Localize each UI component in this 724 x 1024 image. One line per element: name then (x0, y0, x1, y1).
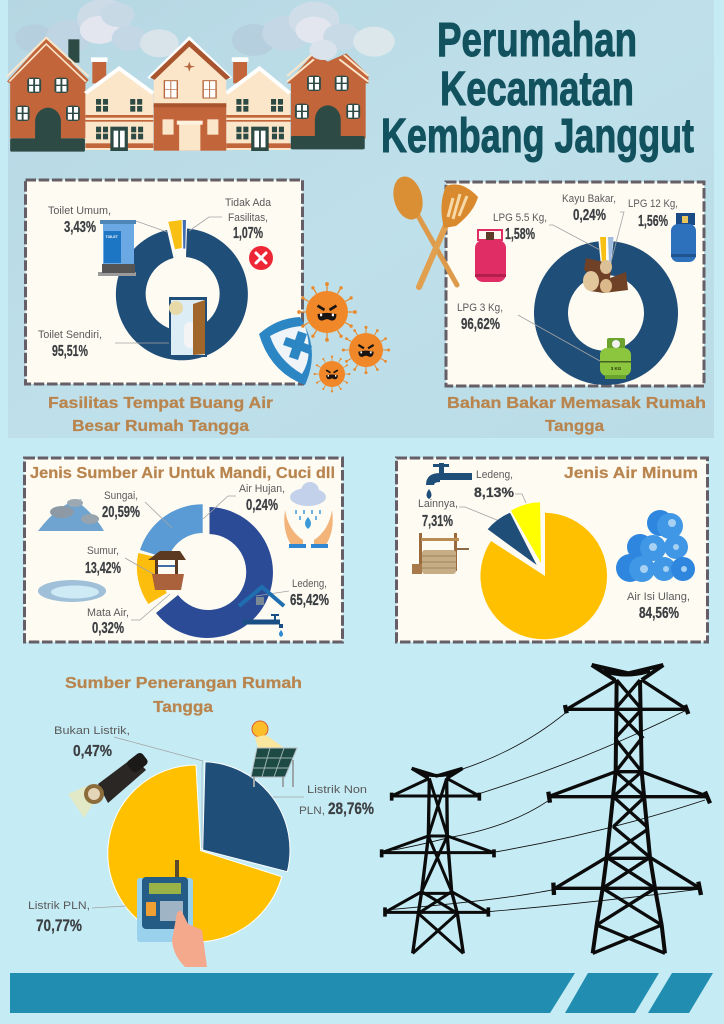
label: listrik pln (28, 900, 90, 935)
icon: green 3kg lpg (600, 338, 631, 379)
label: air hujan: Air Hujan, (239, 483, 285, 495)
icon: river rocks (38, 499, 104, 531)
label: kayu bakar: 0,24% (573, 207, 606, 224)
icon: stone well (412, 533, 469, 574)
label: toilet sendiri (38, 329, 102, 360)
heading: cooking fuel: Tangga (545, 418, 604, 435)
leader lines (518, 212, 624, 361)
label: lpg 12 kg: LPG 12 Kg, (628, 198, 678, 210)
label: sumur: 13,42% (85, 560, 121, 577)
leader lines (125, 496, 289, 620)
icon: water gallons (616, 510, 695, 582)
heading: lighting source: Sumber Penerangan Rumah (65, 675, 302, 692)
panel: drinking water (396, 458, 708, 642)
label: sungai: 20,59% (102, 504, 140, 521)
label: toilet umum: 3,43% (64, 219, 96, 236)
heading: cooking fuel: Bahan Bakar Memasak Rumah (447, 395, 706, 412)
label: lpg 3 kg: LPG 3 Kg, (457, 302, 503, 314)
label: listrik non pln: 28,76% (328, 799, 374, 818)
label: air hujan: 0,24% (246, 497, 278, 514)
label: lpg 5.5 kg: 1,58% (505, 226, 535, 243)
label: ledeng (474, 469, 515, 500)
icon: bathroom door (169, 297, 207, 357)
leader lines (115, 217, 222, 343)
icon: blue lpg cylinder (671, 213, 696, 262)
label: lainnya: 7,31% (422, 513, 453, 530)
panel: bathing water source (24, 458, 342, 642)
illustration: transmission towers (382, 665, 710, 953)
label: lpg 5.5 kg: LPG 5.5 Kg, (493, 212, 547, 224)
label: bukan listrik (54, 725, 130, 760)
label: bukan listrik: 0,47% (73, 743, 112, 760)
heading: toilet facilities: Besar Rumah Tangga (72, 418, 249, 435)
label: toilet sendiri: Toilet Sendiri, (38, 329, 102, 341)
heading: toilet facilities (48, 395, 273, 435)
heading: lighting source: Tangga (153, 699, 213, 716)
footer bar (10, 973, 713, 1013)
title: Perumahan (437, 14, 637, 67)
icon: house and tap (239, 587, 284, 637)
label: listrik pln: 70,77% (36, 916, 82, 935)
label: listrik non pln: Listrik Non (307, 784, 367, 796)
icon: flashlight (68, 751, 149, 818)
heading: lighting source (65, 675, 302, 716)
label: lpg 5.5 kg (493, 212, 547, 243)
icon: public toilet booth (98, 220, 136, 276)
label: ledeng: Ledeng, (292, 578, 327, 590)
title: Kecamatan (440, 63, 634, 116)
label: tidak ada fasilitas: 1,07% (233, 225, 263, 242)
icon: electricity meter with hand (137, 860, 207, 967)
icon: shield with viruses (259, 283, 390, 392)
label: listrik non pln: PLN, (299, 805, 325, 817)
label: lpg 3 kg (457, 302, 503, 333)
label: mata air (87, 607, 129, 637)
label: ledeng: 8,13% (474, 484, 515, 500)
label: tidak ada fasilitas (225, 197, 272, 242)
label: air isi ulang (627, 591, 690, 622)
heading: bathing water source: Jenis Sumber Air Untuk Mandi, Cuci dll (30, 465, 335, 482)
label: sumur (85, 545, 121, 577)
label: ledeng: 65,42% (290, 592, 329, 609)
label: mata air: 0,32% (92, 620, 124, 637)
label: tidak ada fasilitas: Tidak Ada (225, 197, 272, 209)
label: bukan listrik: Bukan Listrik, (54, 725, 130, 737)
leader lines (92, 737, 304, 908)
icon: red cross (249, 246, 273, 270)
label: ledeng (290, 578, 329, 609)
pie chart: drinking water (480, 502, 607, 639)
heading: cooking fuel (447, 395, 706, 435)
label: toilet sendiri: 95,51% (52, 343, 88, 360)
label: tidak ada fasilitas: Fasilitas, (228, 212, 268, 224)
donut chart: toilet facilities (116, 220, 248, 360)
icon: pond (38, 580, 106, 602)
illustration: row of houses with clouds (7, 0, 395, 152)
label: lpg 3 kg: 96,62% (461, 316, 500, 333)
label: air isi ulang: 84,56% (639, 605, 679, 622)
pie chart: lighting source (108, 761, 290, 942)
panel: toilet facilities (26, 180, 302, 384)
leader lines (459, 494, 526, 520)
donut chart: bathing water source (137, 504, 273, 638)
icon: firewood logs (583, 258, 628, 293)
label: sungai: Sungai, (104, 490, 138, 502)
label: air hujan (239, 483, 285, 514)
label: listrik non pln (299, 784, 374, 818)
panel: cooking fuel (446, 182, 704, 386)
icon: water tap (426, 463, 472, 499)
label: listrik pln: Listrik PLN, (28, 900, 90, 912)
label: sungai (102, 490, 140, 521)
heading: drinking water: Jenis Air Minum (564, 465, 698, 482)
header and top section background (8, 0, 714, 438)
label: kayu bakar (562, 193, 616, 224)
label: lainnya (418, 498, 458, 530)
icon: public toilet booth: TOILET (106, 235, 119, 239)
icon: solar panel (251, 721, 297, 787)
heading: toilet facilities: Fasilitas Tempat Buang Air (48, 395, 273, 412)
label: air isi ulang: Air Isi Ulang, (627, 591, 690, 603)
icon: green 3kg lpg: 3 KG (611, 366, 622, 371)
icon: rain and hands (284, 482, 333, 548)
label: sumur: Sumur, (87, 545, 119, 557)
label: lpg 12 kg (628, 198, 678, 230)
donut chart: cooking fuel (534, 237, 678, 385)
label: toilet umum: Toilet Umum, (48, 205, 111, 217)
icon: well (148, 551, 186, 590)
label: mata air: Mata Air, (87, 607, 129, 619)
title (381, 14, 694, 163)
label: toilet umum (48, 205, 111, 236)
label: lainnya: Lainnya, (418, 498, 458, 510)
label: ledeng: Ledeng, (476, 469, 513, 481)
icon: wooden spoon and spatula (389, 173, 478, 287)
label: lpg 12 kg: 1,56% (638, 213, 668, 230)
label: kayu bakar: Kayu Bakar, (562, 193, 616, 205)
icon: pink lpg cylinder (475, 230, 506, 282)
